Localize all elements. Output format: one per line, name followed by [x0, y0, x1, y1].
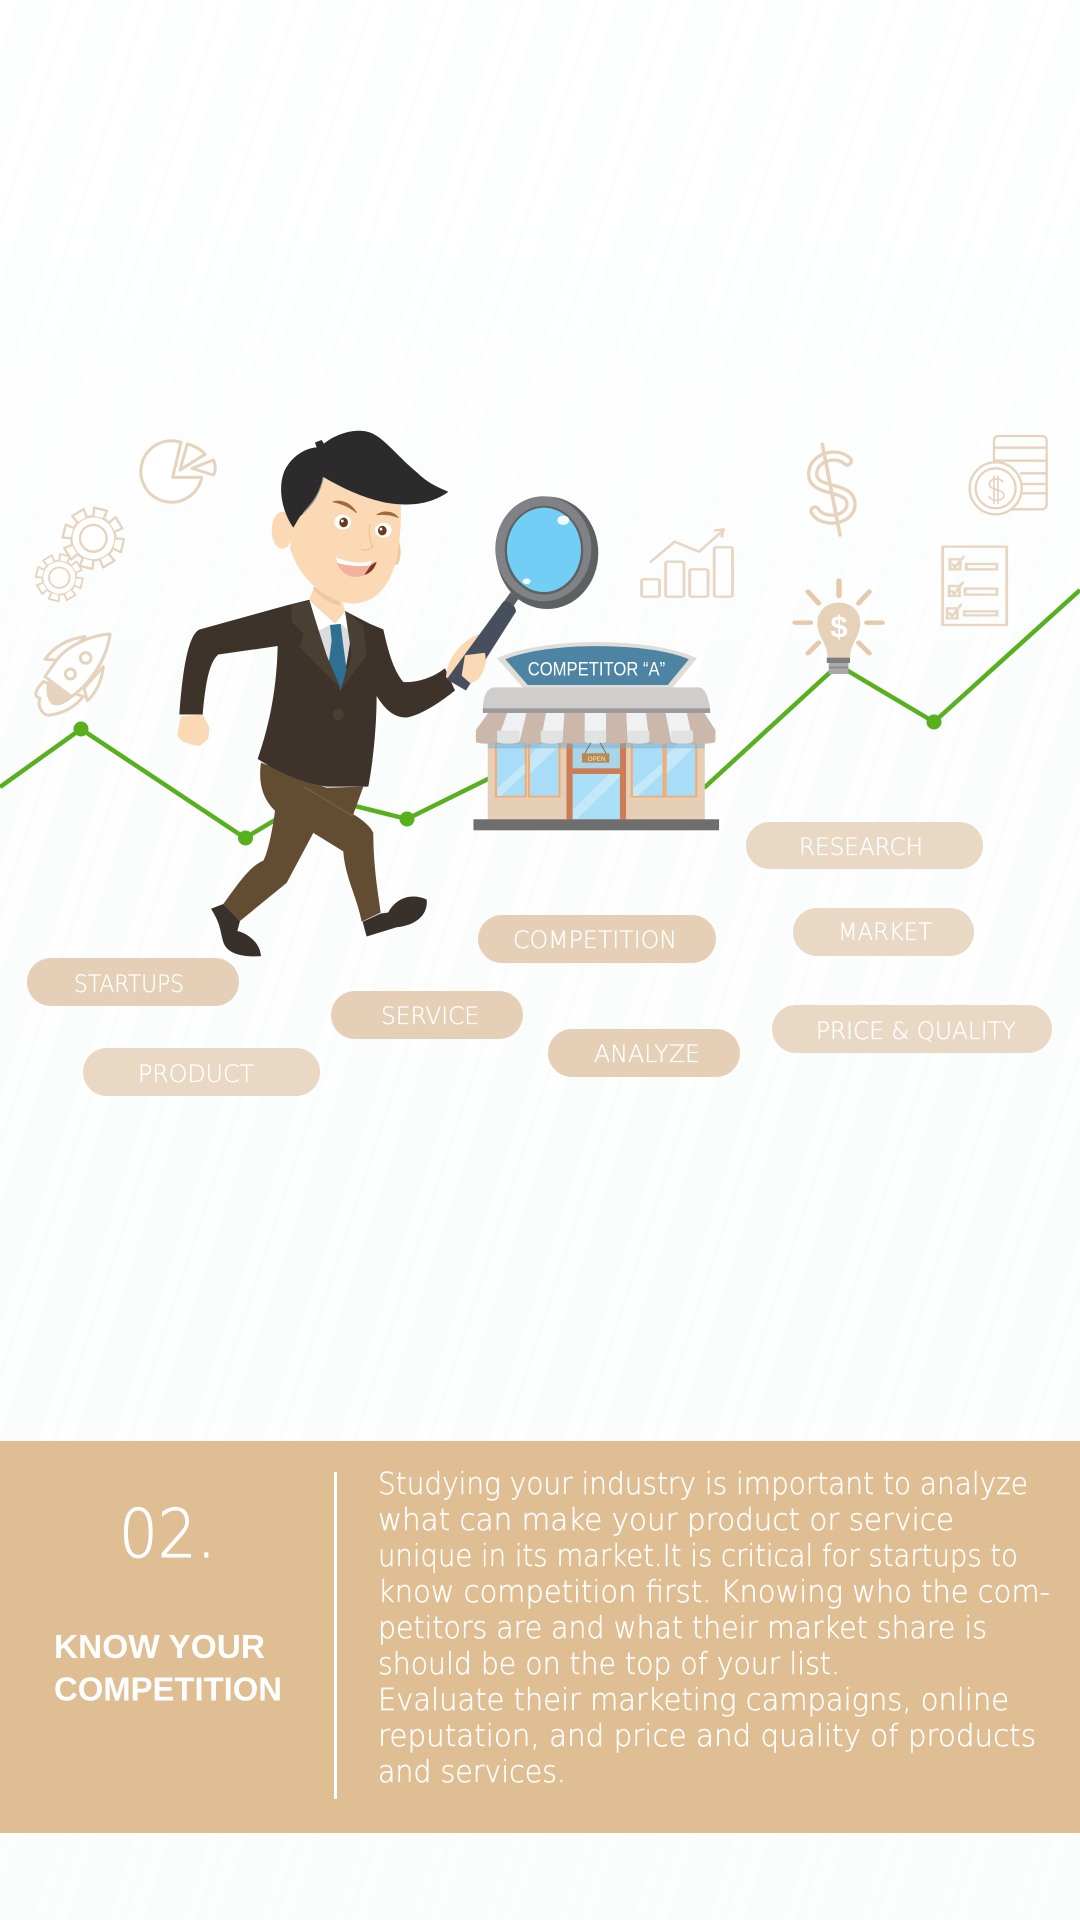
word pill: PRICE & QUALITY: PRICE & QUALITY: [816, 1017, 1016, 1045]
hair: [281, 431, 448, 528]
ears: [272, 512, 401, 565]
step number: 02.: [119, 1495, 216, 1573]
lapels and button: [292, 601, 367, 720]
word pill: RESEARCH: RESEARCH: [799, 833, 923, 861]
body text: Evaluate their marketing campaigns, online: [378, 1683, 1009, 1718]
shop awning: [476, 713, 715, 748]
body text: [378, 1467, 1050, 1790]
shop roof: [483, 687, 710, 713]
bottom panel: [0, 1441, 1080, 1833]
word pill: COMPETITION: [478, 915, 716, 963]
word pill: SERVICE: [331, 991, 523, 1039]
icon: gears: [31, 502, 130, 606]
businessman running with magnifier: [177, 431, 598, 956]
icon: pie chart: [141, 441, 215, 502]
right hand back: [446, 634, 487, 683]
icon: dollar sign: [813, 444, 851, 535]
trousers: [223, 763, 381, 922]
word pill: ANALYZE: [548, 1029, 740, 1077]
left hand: [177, 714, 209, 746]
word pill: MARKET: [793, 908, 974, 956]
green growth line chart: [0, 590, 1080, 846]
shop: competitor A: [473, 642, 719, 830]
body text: and services.: [378, 1755, 566, 1790]
body text: petitors are and what their market share is: [378, 1611, 987, 1646]
jacket: [179, 600, 455, 787]
shirt and collar: [309, 600, 352, 689]
body text: Studying your industry is important to analyze: [378, 1467, 1028, 1502]
body text: reputation, and price and quality of products: [378, 1719, 1036, 1754]
eyes and eyebrows: [333, 501, 398, 550]
word pill: PRICE & QUALITY: [772, 1005, 1052, 1053]
right hand fingers: [462, 653, 486, 683]
word pill: PRODUCT: [83, 1048, 320, 1096]
section heading: KNOW YOUR: [54, 1628, 265, 1665]
sign text: COMPETITOR “A”: [528, 658, 665, 680]
icon: bar chart with arrow: [642, 529, 733, 597]
face: [290, 477, 401, 604]
body text: know competition first. Knowing who the com-: [378, 1575, 1050, 1610]
icon: light bulb with dollar: $: [830, 609, 848, 644]
mouth: [335, 557, 377, 577]
shop body: [488, 738, 705, 820]
shop base: [473, 819, 719, 830]
word pill: STARTUPS: [27, 958, 239, 1006]
divider: [334, 1472, 337, 1799]
icon: coin stack: [970, 436, 1047, 514]
word pill: RESEARCH: [746, 822, 983, 869]
icon: light bulb with dollar: [795, 581, 882, 674]
open sign hanger: [582, 743, 609, 763]
section heading: COMPETITION: [54, 1670, 282, 1708]
icon: checklist: [943, 547, 1007, 625]
word pill: SERVICE: SERVICE: [381, 1002, 479, 1030]
shop door: [566, 742, 626, 819]
word pill: MARKET: MARKET: [838, 918, 932, 946]
word pill: STARTUPS: STARTUPS: [74, 970, 184, 998]
shop windows: [496, 743, 696, 797]
icon: rocket: [36, 634, 110, 715]
word pill: COMPETITION: COMPETITION: [513, 926, 677, 954]
body text: what can make your product or service: [378, 1503, 954, 1538]
shoes: [211, 897, 427, 956]
neck: [309, 587, 345, 623]
word pill: PRODUCT: PRODUCT: [138, 1060, 254, 1088]
word pill: ANALYZE: ANALYZE: [594, 1040, 700, 1068]
section heading: [54, 1628, 282, 1708]
open text: OPEN: [588, 756, 606, 763]
body text: unique in its market.It is critical for startups to: [378, 1539, 1018, 1574]
tie: [328, 624, 347, 690]
shop sign: [497, 642, 697, 688]
magnifier: [447, 496, 598, 690]
body text: should be on the top of your list.: [378, 1647, 840, 1682]
